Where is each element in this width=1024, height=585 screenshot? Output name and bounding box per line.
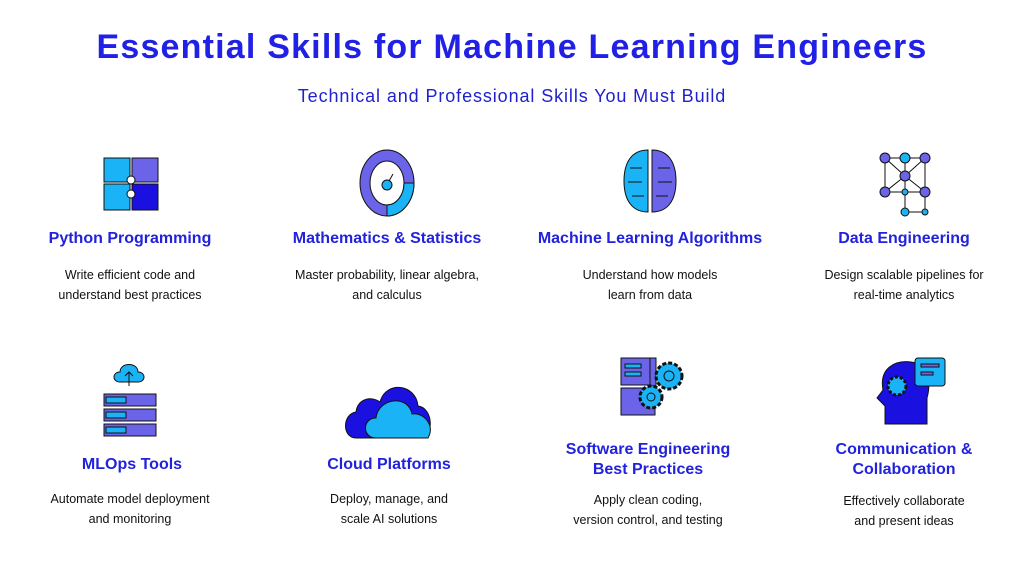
text: mlops: Automate model deployment — [50, 492, 210, 506]
heading: data eng: Data Engineering — [838, 230, 970, 247]
icon: puzzle — [104, 158, 158, 210]
icon: servers — [104, 364, 156, 436]
text: data eng — [824, 268, 984, 302]
text: ml: Understand how models — [583, 268, 717, 282]
text: python — [58, 268, 202, 302]
text: cloud: Deploy, manage, and — [330, 492, 448, 506]
text: cloud — [330, 492, 448, 526]
heading: cloud: Cloud Platforms — [327, 456, 451, 473]
subtitle: Technical and Professional Skills You Must Build — [298, 86, 726, 106]
heading: software eng: Best Practices — [593, 461, 703, 478]
text: software eng — [573, 493, 723, 526]
icon: head with speech — [876, 358, 946, 424]
heading: communication: Communication & — [836, 441, 972, 458]
text: math — [295, 268, 479, 302]
text: math: Master probability, linear algebra, — [295, 268, 479, 282]
heading: software eng — [566, 441, 730, 478]
icon: cloud — [345, 386, 431, 438]
heading: communication — [836, 441, 972, 478]
heading: python: Python Programming — [49, 230, 211, 247]
icon: brain — [624, 150, 676, 212]
text: communication — [843, 494, 965, 528]
heading: communication: Collaboration — [852, 461, 956, 478]
heading: math: Mathematics & Statistics — [293, 230, 481, 247]
heading: mlops: MLOps Tools — [82, 456, 182, 473]
text: software eng: version control, and testing — [573, 512, 723, 526]
text: communication: Effectively collaborate — [843, 494, 965, 508]
text: data eng: Design scalable pipelines for — [824, 268, 984, 282]
title: Essential Skills for Machine Learning Engineers — [96, 28, 928, 66]
heading: ml algorithms: Machine Learning Algorithms — [538, 230, 762, 247]
text: python: understand best practices — [58, 288, 202, 302]
text: cloud: scale AI solutions — [341, 512, 437, 526]
text: mlops — [50, 492, 210, 526]
icon: gauge — [360, 150, 414, 216]
heading: software eng: Software Engineering — [566, 441, 730, 458]
text: software eng: Apply clean coding, — [594, 493, 702, 507]
text: mlops: and monitoring — [89, 512, 171, 526]
text: python: Write efficient code and — [65, 268, 195, 282]
text: math: and calculus — [352, 288, 422, 302]
text: ml: learn from data — [608, 288, 692, 302]
text: data eng: real-time analytics — [854, 288, 954, 302]
icon: code gears — [620, 358, 684, 416]
icon: network — [880, 152, 930, 216]
text: communication: and present ideas — [854, 514, 954, 528]
text: ml — [583, 268, 717, 302]
